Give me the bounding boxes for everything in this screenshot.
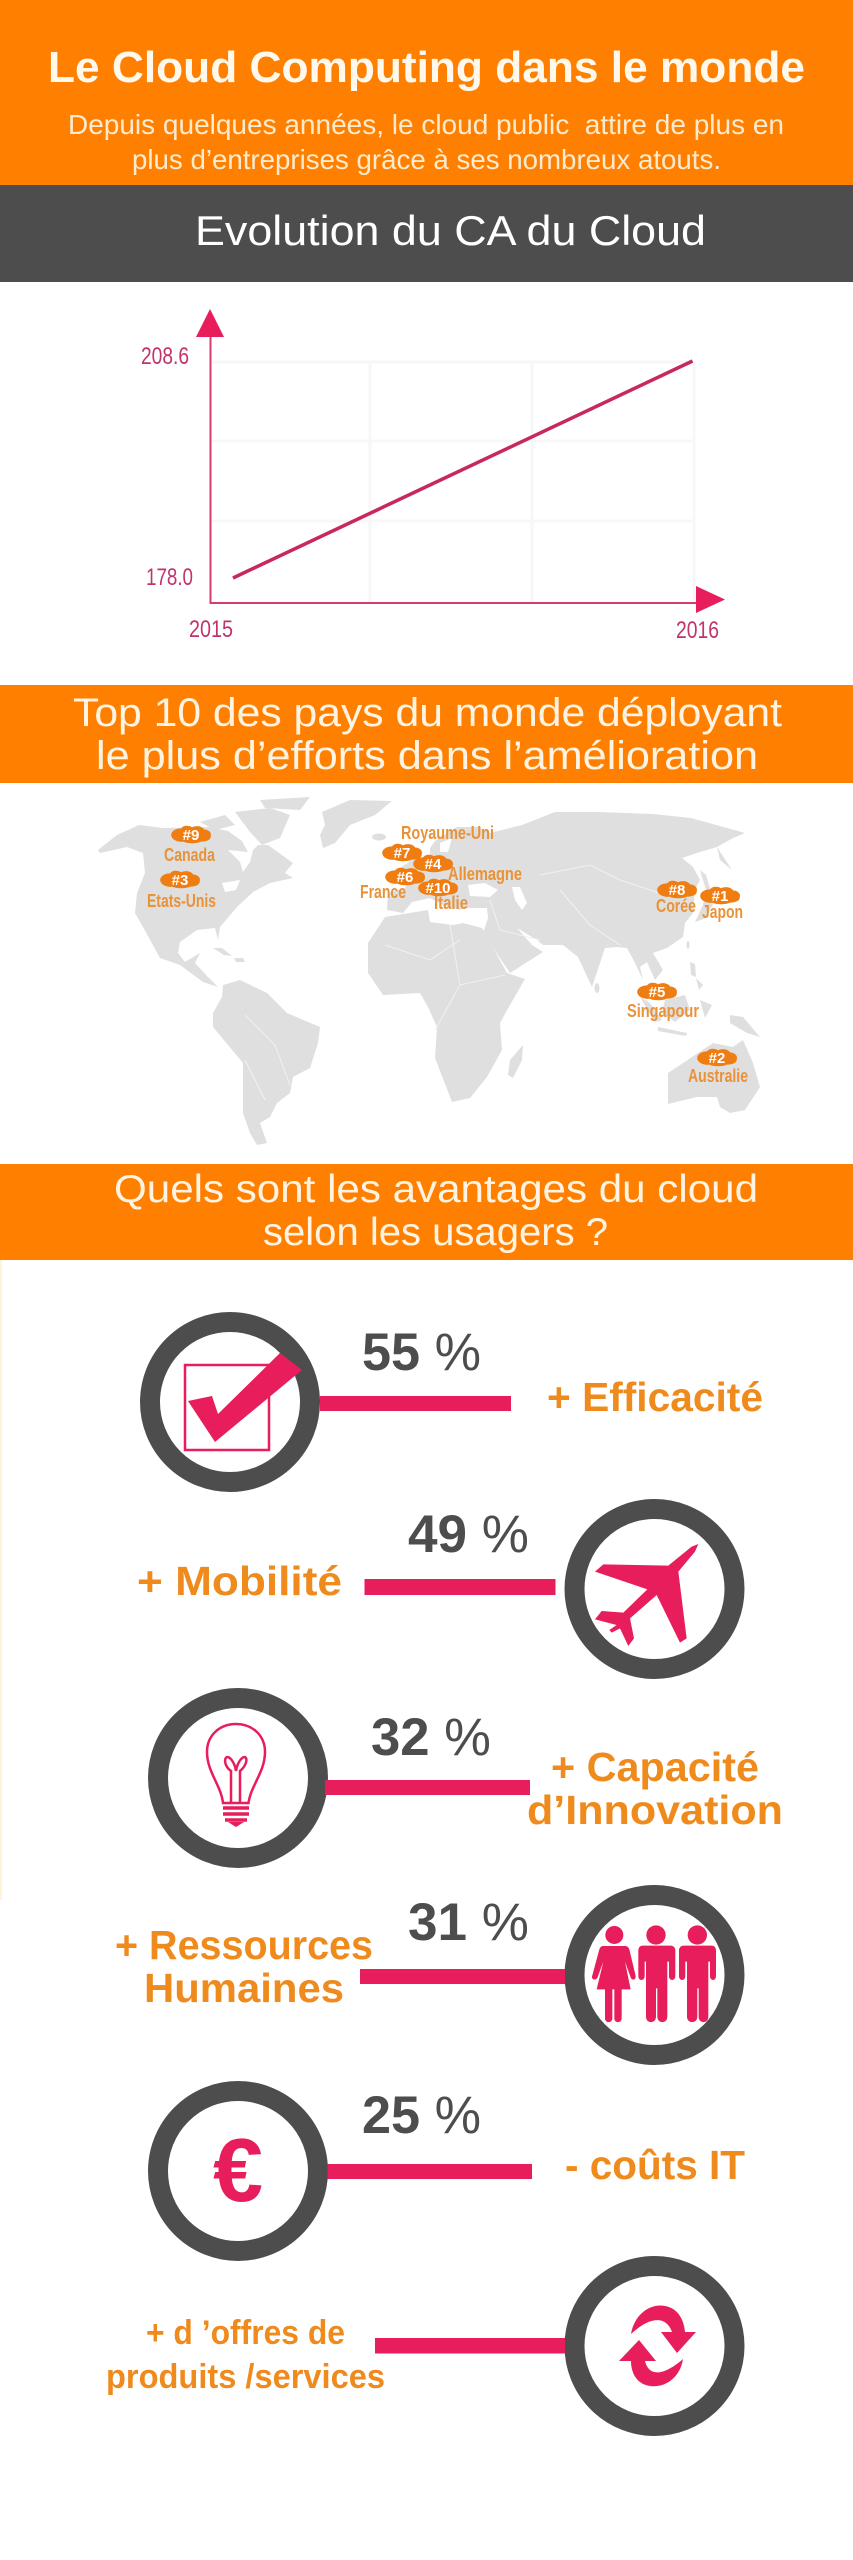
label efficacité: + Efficacité: [547, 1374, 763, 1420]
line chart: [141, 309, 725, 644]
cloud marker: Etats-Unis #3: [160, 871, 200, 889]
value 32 %: 32 %: [371, 1708, 491, 1767]
country labels: Corée: [656, 896, 696, 916]
label capacité d'innovation: [527, 1744, 783, 1833]
axes with arrows: [196, 309, 725, 613]
axis labels: 2016: [676, 617, 719, 644]
icon: light bulb: [207, 1724, 265, 1827]
advantage row: ressources humaines: [115, 1893, 734, 2055]
value 55 %: 55 %: [362, 1323, 481, 1382]
advantage row: coûts IT: [158, 2086, 745, 2251]
cloud marker: Australie #2: #2: [709, 1050, 725, 1067]
country labels: Allemagne: [448, 864, 522, 884]
subtitle: [68, 109, 784, 175]
cloud marker: Allemagne #4: [413, 855, 453, 873]
cloud marker: France #6: #6: [397, 869, 413, 886]
cloud marker: Japon #1: [700, 887, 740, 905]
cloud marker: Italie #10: #10: [425, 880, 451, 897]
label offres produits services: [106, 2314, 385, 2396]
axis labels: [141, 343, 719, 644]
cloud marker: Italie #10: [418, 879, 458, 897]
cloud marker: Corée #8: #8: [669, 882, 685, 899]
country labels: Japon: [702, 902, 743, 922]
cloud marker: Etats-Unis #3: #3: [172, 872, 188, 889]
section heading: avantages: Quels sont les avantages du cloud: [114, 1168, 758, 1211]
advantage row: innovation: [158, 1698, 783, 1858]
cloud marker: Singapour #5: #5: [649, 984, 665, 1001]
country labels: Canada: [164, 845, 216, 865]
label coûts IT: - coûts IT: [565, 2142, 745, 2188]
cloud marker: Canada #9: [171, 826, 211, 844]
cloud marker: Royaume-Uni #7: [382, 844, 422, 862]
cloud marker: Canada #9: #9: [183, 827, 199, 844]
section heading: evolution: Evolution du CA du Cloud: [195, 207, 706, 254]
icon: checkmark: [185, 1353, 302, 1450]
label ressources humaines: + Ressources: [115, 1922, 373, 1968]
advantage row: mobilité: [137, 1505, 734, 1669]
label ressources humaines: Humaines: [144, 1965, 344, 2011]
label ressources humaines: [115, 1922, 373, 2011]
value 25 %: 25 %: [362, 2086, 481, 2145]
country labels: Etats-Unis: [147, 891, 216, 911]
world map: [98, 797, 760, 1145]
cloud marker: Corée #8: [657, 881, 697, 899]
axis labels: 208.6: [141, 343, 189, 370]
land masses: [98, 797, 760, 1145]
label mobilité: + Mobilité: [137, 1558, 342, 1604]
advantage row: efficacité: [150, 1322, 763, 1482]
icon: euro: €: [213, 2121, 263, 2221]
cloud marker: Singapour #5: [637, 983, 677, 1001]
country labels: France: [360, 882, 406, 902]
cloud marker: Allemagne #4: #4: [425, 856, 442, 873]
country labels: Royaume-Uni: [401, 823, 494, 843]
cloud marker: France #6: [385, 868, 425, 886]
data line: [233, 361, 692, 578]
axis labels: 178.0: [146, 564, 193, 591]
value 49 %: 49 %: [408, 1505, 529, 1564]
label capacité d'innovation: + Capacité: [551, 1744, 759, 1790]
title: Le Cloud Computing dans le monde: [48, 43, 805, 92]
icon: refresh arrows: [619, 2306, 696, 2386]
subtitle: Depuis quelques années, le cloud public attire de plus en: [68, 109, 784, 140]
section heading: avantages: [0, 1164, 853, 1260]
cloud marker: Japon #1: #1: [712, 888, 728, 905]
section heading: evolution: [0, 185, 853, 282]
country labels: Australie: [688, 1066, 748, 1086]
country labels: Singapour: [627, 1001, 699, 1021]
value 31 %: 31 %: [408, 1893, 529, 1952]
cloud marker: Australie #2: [697, 1049, 737, 1067]
label offres produits services: produits /services: [106, 2358, 385, 2396]
section heading: avantages: selon les usagers ?: [263, 1211, 608, 1254]
section heading: top 10: Top 10 des pays du monde déployant: [73, 691, 782, 735]
icon: plane: [595, 1544, 698, 1646]
section heading: top 10: [0, 685, 853, 783]
subtitle: plus d’entreprises grâce à ses nombreux atouts.: [132, 144, 721, 175]
label capacité d'innovation: d’Innovation: [527, 1787, 783, 1833]
icon: people: [592, 1925, 716, 2022]
header panel: [0, 0, 853, 185]
cloud marker: Royaume-Uni #7: #7: [394, 845, 410, 862]
label offres produits services: + d ’offres de: [146, 2314, 345, 2352]
section heading: top 10: le plus d’efforts dans l’amélioration: [96, 734, 758, 778]
axis labels: 2015: [189, 616, 233, 643]
advantage row: offres: [106, 2266, 734, 2426]
country labels: Italie: [434, 893, 468, 913]
country labels: [147, 823, 748, 1086]
